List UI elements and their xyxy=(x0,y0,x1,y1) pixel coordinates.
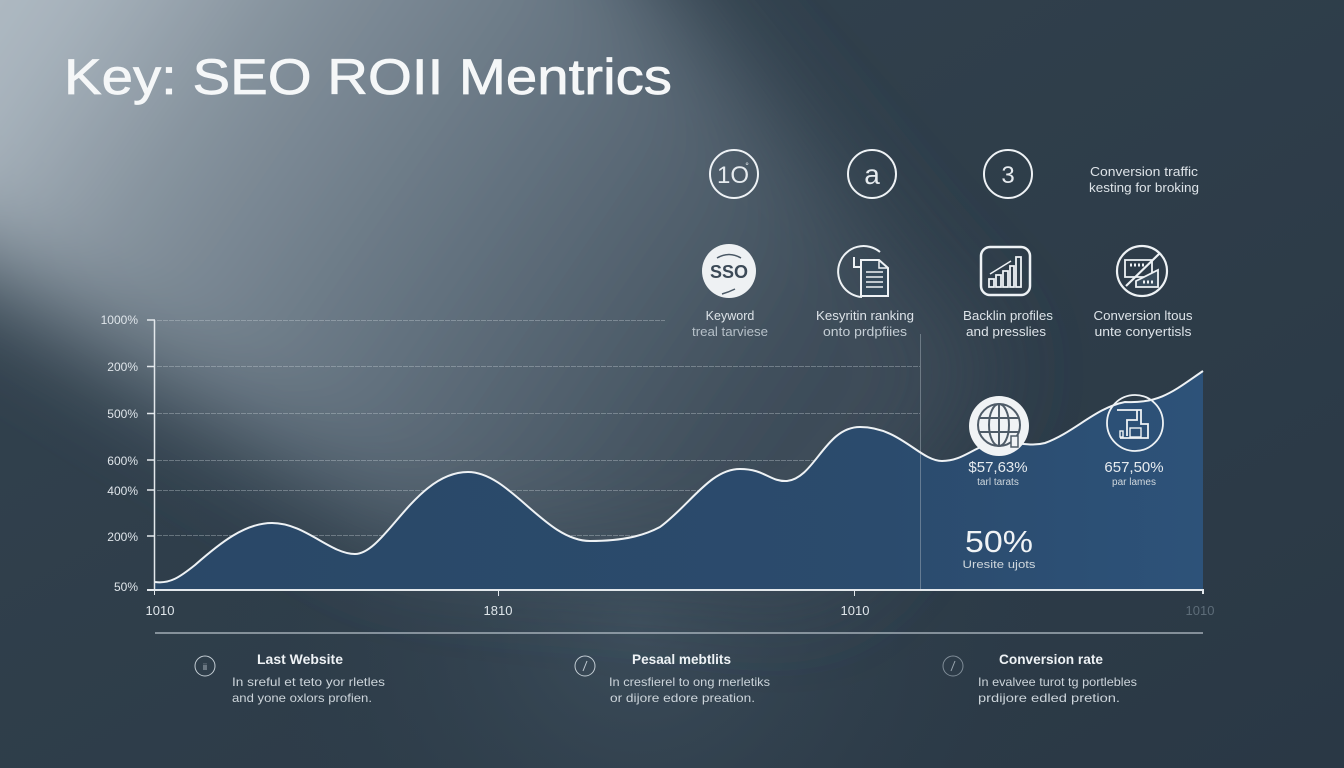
x axis labels xyxy=(146,603,1214,618)
x axis labels: 1810 xyxy=(484,603,512,618)
stat: right: par lames xyxy=(1112,477,1156,488)
column captions: Keyword xyxy=(706,309,754,323)
stat: 50%: 50% xyxy=(965,524,1033,559)
footer item 1: ii xyxy=(203,662,207,672)
column captions: Backlin profiles xyxy=(963,309,1053,323)
footer item 3 xyxy=(943,651,1137,705)
footer item 1: and yone oxlors profien. xyxy=(232,691,372,705)
y axis labels: 200% xyxy=(107,530,138,544)
footer item 1: Last Website xyxy=(257,651,343,667)
axes xyxy=(147,320,1203,596)
stat: right: 657,50% xyxy=(1104,459,1164,476)
footer item 3: Conversion rate xyxy=(999,651,1103,667)
y axis labels: 400% xyxy=(107,484,138,498)
footer item 2: In cresfierel to ong rnerletiks xyxy=(609,675,770,689)
icon: SEO badge: SSO xyxy=(710,262,748,282)
step badge 1 xyxy=(710,150,758,198)
column captions: Kesyritin ranking xyxy=(816,309,914,323)
footer item 3: In evalvee turot tg portlebles xyxy=(978,675,1137,689)
step badge 3 xyxy=(984,150,1032,198)
footer item 2: Pesaal mebtlits xyxy=(632,651,731,667)
icon: prohibited charts xyxy=(1117,246,1167,296)
step badge 1: ° xyxy=(745,161,749,171)
column captions: unte conyertisls xyxy=(1094,325,1192,339)
stat: left: $57,63% xyxy=(968,459,1028,476)
stat: 50%: Uresite ujots xyxy=(962,559,1036,571)
footer item 3: prdijore edled pretion. xyxy=(978,691,1120,705)
column captions: onto prdpfiies xyxy=(823,325,907,339)
y axis labels: 1000% xyxy=(101,313,138,327)
footer rule xyxy=(155,632,1203,634)
step badge 1: 1O xyxy=(717,162,749,189)
icon: network xyxy=(1107,395,1163,451)
column captions: treal tarviese xyxy=(692,325,768,339)
stat: left xyxy=(968,459,1028,488)
area chart xyxy=(155,334,1203,589)
gridlines xyxy=(157,320,920,536)
stat: right xyxy=(1104,459,1164,488)
x axis labels: 1010 xyxy=(1186,603,1214,618)
top note xyxy=(1089,165,1199,195)
x axis labels: 1010 xyxy=(146,603,174,618)
icon: bar chart xyxy=(981,247,1030,295)
step badge 3: 3 xyxy=(1001,162,1015,189)
y axis labels xyxy=(101,313,138,594)
icon: SEO badge xyxy=(702,244,756,298)
footer item 2 xyxy=(575,651,770,705)
footer item 2: or dijore edore preation. xyxy=(610,691,755,705)
y axis labels: 600% xyxy=(107,454,138,468)
step badge 2: a xyxy=(864,159,880,190)
y axis labels: 500% xyxy=(107,407,138,421)
top note: Conversion traffic xyxy=(1090,165,1198,179)
trend line xyxy=(155,371,1203,582)
icon: document xyxy=(838,246,888,297)
step badge 2 xyxy=(848,150,896,198)
icon: globe xyxy=(969,396,1029,456)
stat: 50% xyxy=(962,524,1036,571)
top note: kesting for broking xyxy=(1089,181,1199,195)
stat: left: tarl tarats xyxy=(977,477,1019,488)
y axis labels: 200% xyxy=(107,360,138,374)
column captions: and presslies xyxy=(966,325,1046,339)
footer item 1 xyxy=(195,651,385,705)
y axis labels: 50% xyxy=(114,580,138,594)
column captions: Conversion ltous xyxy=(1094,309,1192,323)
title: Key: SEO ROII Mentrics xyxy=(64,49,672,105)
x axis labels: 1010 xyxy=(841,603,869,618)
vertical divider xyxy=(920,334,922,589)
footer item 1: In sreful et teto yor rletles xyxy=(232,675,385,689)
column captions xyxy=(692,309,1192,339)
area fill xyxy=(155,371,1203,589)
